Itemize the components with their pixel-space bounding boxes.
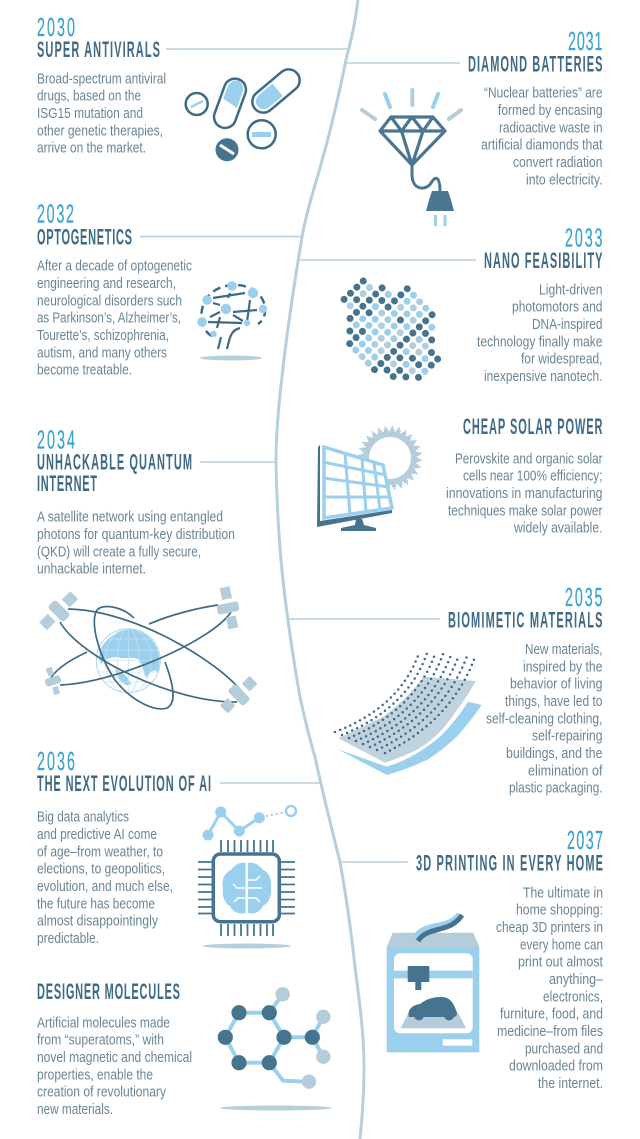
text: 3D printing body (496, 885, 604, 1092)
text: biomimetic materials body: New materials, (525, 642, 602, 658)
text: quantum internet body: (QKD) will create a fully secure, (37, 544, 201, 560)
text: nano feasibility body (477, 282, 602, 385)
year 2030: 2030 (37, 14, 75, 42)
year 2032: 2032 (37, 200, 74, 229)
text: 3D printing body: anything– (549, 972, 604, 988)
text: cheap solar power body: Perovskite and organic solar (455, 451, 603, 467)
icon: nanoparticle dot lattice (325, 263, 457, 396)
text: 3D printing body: cheap 3D printers in (496, 920, 603, 936)
text: next evolution of AI body: elections, to geopolitics, (37, 862, 165, 878)
icon: pills (186, 65, 304, 161)
panel: 2032 optogenetics (37, 200, 267, 379)
text: quantum internet body: A satellite network using entangled (37, 510, 223, 526)
text: designer molecules body (37, 1015, 192, 1118)
year 2034: 2034 (37, 426, 75, 454)
timeline spine (276, 0, 364, 1139)
text: quantum internet body: photons for quantum-key distribution (37, 527, 235, 543)
text: nano feasibility body: inexpensive nanotech. (484, 369, 602, 385)
text: 3D printing body: medicine–from files (497, 1024, 603, 1040)
panel: 2031 diamond batteries (362, 28, 602, 226)
text: nano feasibility body: Light-driven (539, 282, 602, 298)
text: biomimetic materials body: self-cleaning clothing, (486, 711, 602, 727)
text: next evolution of AI body (37, 810, 173, 947)
text: nano feasibility body: technology finally make (477, 334, 602, 350)
icon: solar panel and sun (317, 428, 420, 531)
text: designer molecules body: properties, enable the (37, 1067, 153, 1083)
text: super antivirals body: Broad-spectrum antiviral (37, 71, 166, 87)
text: optogenetics body: Tourette’s, schizophrenia, (37, 328, 169, 344)
text: next evolution of AI body: of age–from weather, to (37, 844, 163, 860)
text: diamond batteries body: formed by encasing (498, 103, 602, 119)
text: cheap solar power body: widely available. (513, 521, 602, 537)
year 2033: 2033 (565, 224, 603, 253)
panel: designer molecules (37, 979, 332, 1118)
heading: the next evolution of AI: THE NEXT EVOLUTION OF AI (37, 771, 211, 796)
text: biomimetic materials body: buildings, and the (506, 746, 602, 762)
panel: cheap solar power (317, 414, 603, 537)
icon: layered biomimetic sheets (335, 653, 482, 775)
text: biomimetic materials body (486, 642, 603, 797)
text: diamond batteries body: into electricity. (526, 172, 602, 188)
text: optogenetics body: After a decade of optogenetic (37, 259, 192, 275)
text: super antivirals body: other genetic therapies, (37, 123, 163, 139)
text: biomimetic materials body: elimination of (528, 763, 603, 779)
heading: diamond batteries: DIAMOND BATTERIES (468, 51, 602, 77)
icon: brain network (197, 281, 267, 360)
text: nano feasibility body: for widespread, (521, 352, 602, 368)
heading: nano feasibility: NANO FEASIBILITY (484, 248, 603, 273)
text: designer molecules body: creation of revolutionary (37, 1085, 167, 1101)
text: 3D printing body: downloaded from (509, 1059, 603, 1075)
text: optogenetics body: become treatable. (37, 363, 132, 379)
year 2036: 2036 (37, 748, 75, 776)
text: designer molecules body: from “superatoms,” with (37, 1033, 164, 1049)
panel: 2037 3D printing in every home (387, 827, 604, 1092)
icon: globe with satellites and orbits (36, 585, 262, 718)
heading: biomimetic materials: BIOMIMETIC MATERIALS (448, 607, 602, 632)
panel: 2034 unhackable quantum internet (36, 426, 262, 718)
text: quantum internet body: unhackable internet. (37, 562, 146, 578)
text: diamond batteries body: artificial diamonds that (481, 138, 602, 154)
text: biomimetic materials body: behavior of living (510, 677, 602, 693)
icon: 3D printer with car (387, 914, 479, 1052)
text: cheap solar power body: techniques make solar power (448, 503, 603, 519)
text: 3D printing body: furniture, food, and (500, 1007, 603, 1023)
text: nano feasibility body: DNA-inspired (532, 317, 602, 333)
text: next evolution of AI body: predictable. (37, 931, 99, 947)
text: optogenetics body (37, 259, 192, 379)
text: optogenetics body: as Parkinson’s, Alzheimer’s, (37, 311, 181, 327)
text: 3D printing body: the internet. (538, 1076, 603, 1092)
text: next evolution of AI body: Big data analytics (37, 810, 129, 826)
heading: unhackable quantum internet: INTERNET (37, 471, 97, 496)
text: cheap solar power body: innovations in manufacturing (446, 486, 602, 502)
heading: designer molecules: DESIGNER MOLECULES (37, 979, 180, 1004)
text: 3D printing body: print out almost (518, 955, 603, 971)
heading: unhackable quantum internet (37, 449, 192, 496)
icon: diamond with plug (362, 90, 461, 226)
heading: unhackable quantum internet: UNHACKABLE QUANTUM (37, 449, 192, 474)
text: 3D printing body: electronics, (543, 989, 603, 1005)
text: next evolution of AI body: almost disappointingly (37, 914, 159, 930)
panel: 2036 the next evolution of AI (37, 748, 296, 948)
heading: super antivirals: SUPER ANTIVIRALS (37, 37, 160, 62)
text: biomimetic materials body: plastic packaging. (509, 781, 602, 797)
text: diamond batteries body (481, 86, 602, 188)
text: biomimetic materials body: inspired by the (523, 659, 602, 675)
icon: AI chip with brain and data graph (198, 806, 296, 948)
text: next evolution of AI body: evolution, and much else, (37, 879, 173, 895)
text: designer molecules body: new materials. (37, 1102, 113, 1118)
year 2031: 2031 (568, 28, 602, 56)
text: super antivirals body (37, 71, 166, 157)
panel: 2035 biomimetic materials (335, 584, 603, 797)
text: 3D printing body: every home can (520, 937, 603, 953)
text: optogenetics body: neurological disorders such (37, 293, 182, 309)
text: designer molecules body: Artificial molecules made (37, 1015, 170, 1031)
text: quantum internet body (37, 510, 235, 578)
text: 3D printing body: The ultimate in (523, 885, 603, 901)
panel: 2030 super antivirals (37, 14, 304, 161)
heading: 3D printing in every home: 3D PRINTING IN EVERY HOME (416, 850, 603, 876)
icon: molecule (218, 987, 332, 1110)
text: diamond batteries body: “Nuclear batteries” are (484, 86, 602, 102)
text: 3D printing body: home shopping: (516, 903, 603, 919)
text: biomimetic materials body: self-repairing (532, 729, 602, 745)
text: cheap solar power body (446, 451, 603, 537)
panel: 2033 nano feasibility (325, 224, 603, 396)
text: super antivirals body: ISG15 mutation and (37, 106, 143, 122)
heading: cheap solar power: CHEAP SOLAR POWER (463, 414, 603, 439)
text: super antivirals body: arrive on the market. (37, 141, 146, 157)
text: super antivirals body: drugs, based on the (37, 89, 141, 105)
text: nano feasibility body: photomotors and (512, 300, 602, 316)
text: next evolution of AI body: the future has become (37, 896, 155, 912)
year 2037: 2037 (567, 827, 603, 855)
text: cheap solar power body: cells near 100% efficiency; (463, 469, 602, 485)
text: designer molecules body: novel magnetic and chemical (37, 1050, 192, 1066)
text: biomimetic materials body: things, have led to (505, 694, 602, 710)
year 2035: 2035 (565, 584, 603, 612)
text: 3D printing body: purchased and (525, 1041, 603, 1057)
text: next evolution of AI body: and predictive AI come (37, 827, 157, 843)
text: diamond batteries body: radioactive waste in (499, 120, 602, 136)
text: optogenetics body: engineering and research, (37, 276, 176, 292)
heading: optogenetics: OPTOGENETICS (37, 224, 132, 249)
text: diamond batteries body: convert radiation (513, 155, 602, 171)
text: optogenetics body: autism, and many others (37, 345, 167, 361)
